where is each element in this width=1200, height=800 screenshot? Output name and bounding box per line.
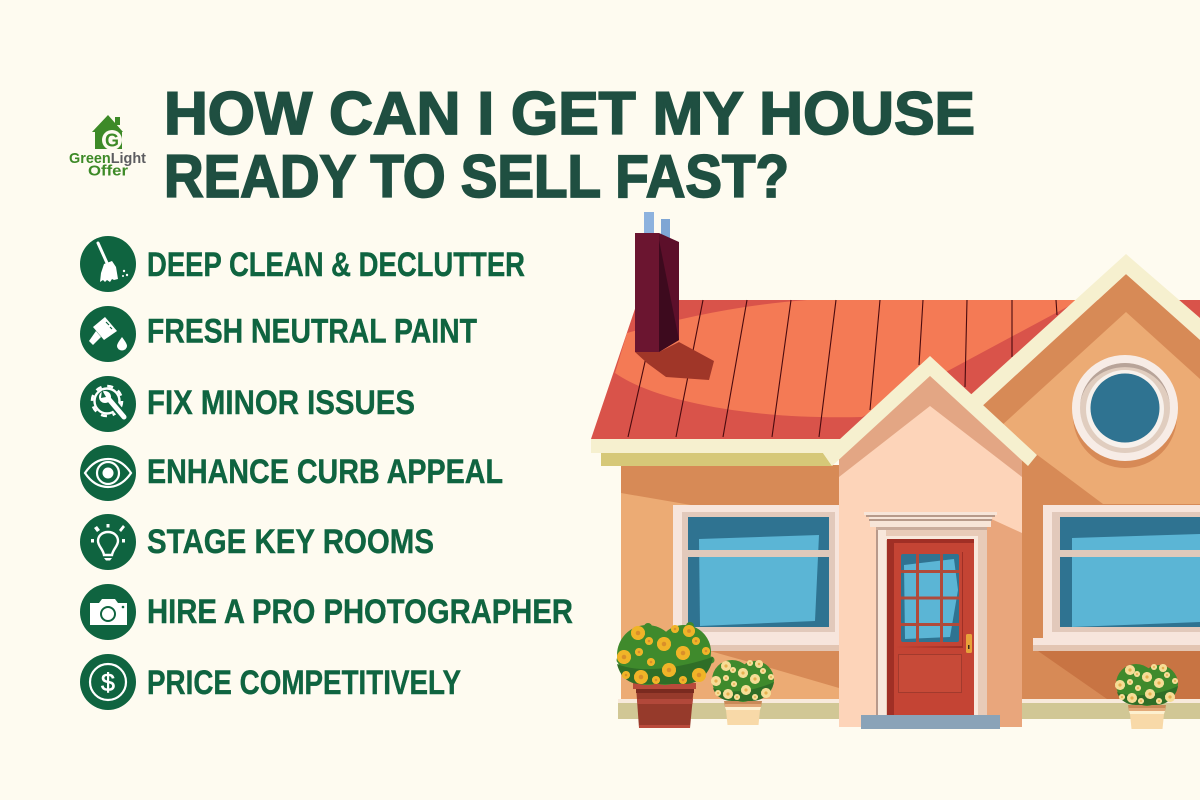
- item: stage key rooms: [80, 514, 434, 570]
- logo: GreenLight Offer: GreenLight: [69, 150, 146, 167]
- logo: GreenLight Offer: [69, 115, 146, 180]
- eave yellow strip: [601, 453, 832, 466]
- big potted plant: [616, 622, 714, 728]
- right wall and gable: [966, 254, 1200, 719]
- item: hire a pro photographer: HIRE A PRO PHOTOGRAPHER: [147, 593, 573, 631]
- left window: [663, 505, 839, 651]
- title: READY TO SELL FAST?: [164, 143, 789, 210]
- item: price competitively: PRICE COMPETITIVELY: [147, 664, 461, 702]
- eave cream trim: [591, 356, 1037, 466]
- checklist: [80, 236, 573, 710]
- item: fresh neutral paint: FRESH NEUTRAL PAINT: [147, 312, 477, 350]
- house illustration: [591, 212, 1200, 729]
- item: fix minor issues: [80, 376, 415, 432]
- item: deep clean and declutter: DEEP CLEAN & DECLUTTER: [147, 246, 525, 284]
- item: stage key rooms: STAGE KEY ROOMS: [147, 523, 434, 561]
- roof: [591, 300, 1200, 445]
- right window: [1033, 505, 1200, 651]
- door frame: [864, 512, 997, 715]
- small potted plant, left: [711, 660, 774, 725]
- door: [861, 539, 1000, 729]
- item: enhance curb appeal: [80, 445, 503, 501]
- item: fresh neutral paint: [80, 306, 477, 362]
- small potted plant, right: [1115, 664, 1178, 729]
- round window: [1072, 355, 1178, 468]
- item: enhance curb appeal: ENHANCE CURB APPEAL: [147, 453, 503, 491]
- title: [164, 80, 975, 210]
- item: hire a pro photographer: [80, 584, 573, 640]
- item: deep clean and declutter: [80, 236, 525, 292]
- title: HOW CAN I GET MY HOUSE: [164, 80, 975, 147]
- item: price competitively: [80, 654, 461, 710]
- item: price competitively: $: [101, 669, 115, 697]
- logo: GreenLight Offer: Offer: [88, 162, 128, 180]
- item: fix minor issues: FIX MINOR ISSUES: [147, 384, 415, 422]
- logo: GreenLight Offer: G: [105, 130, 119, 150]
- front porch: [839, 376, 1022, 727]
- chimney: [635, 212, 679, 352]
- left wall: [618, 465, 839, 719]
